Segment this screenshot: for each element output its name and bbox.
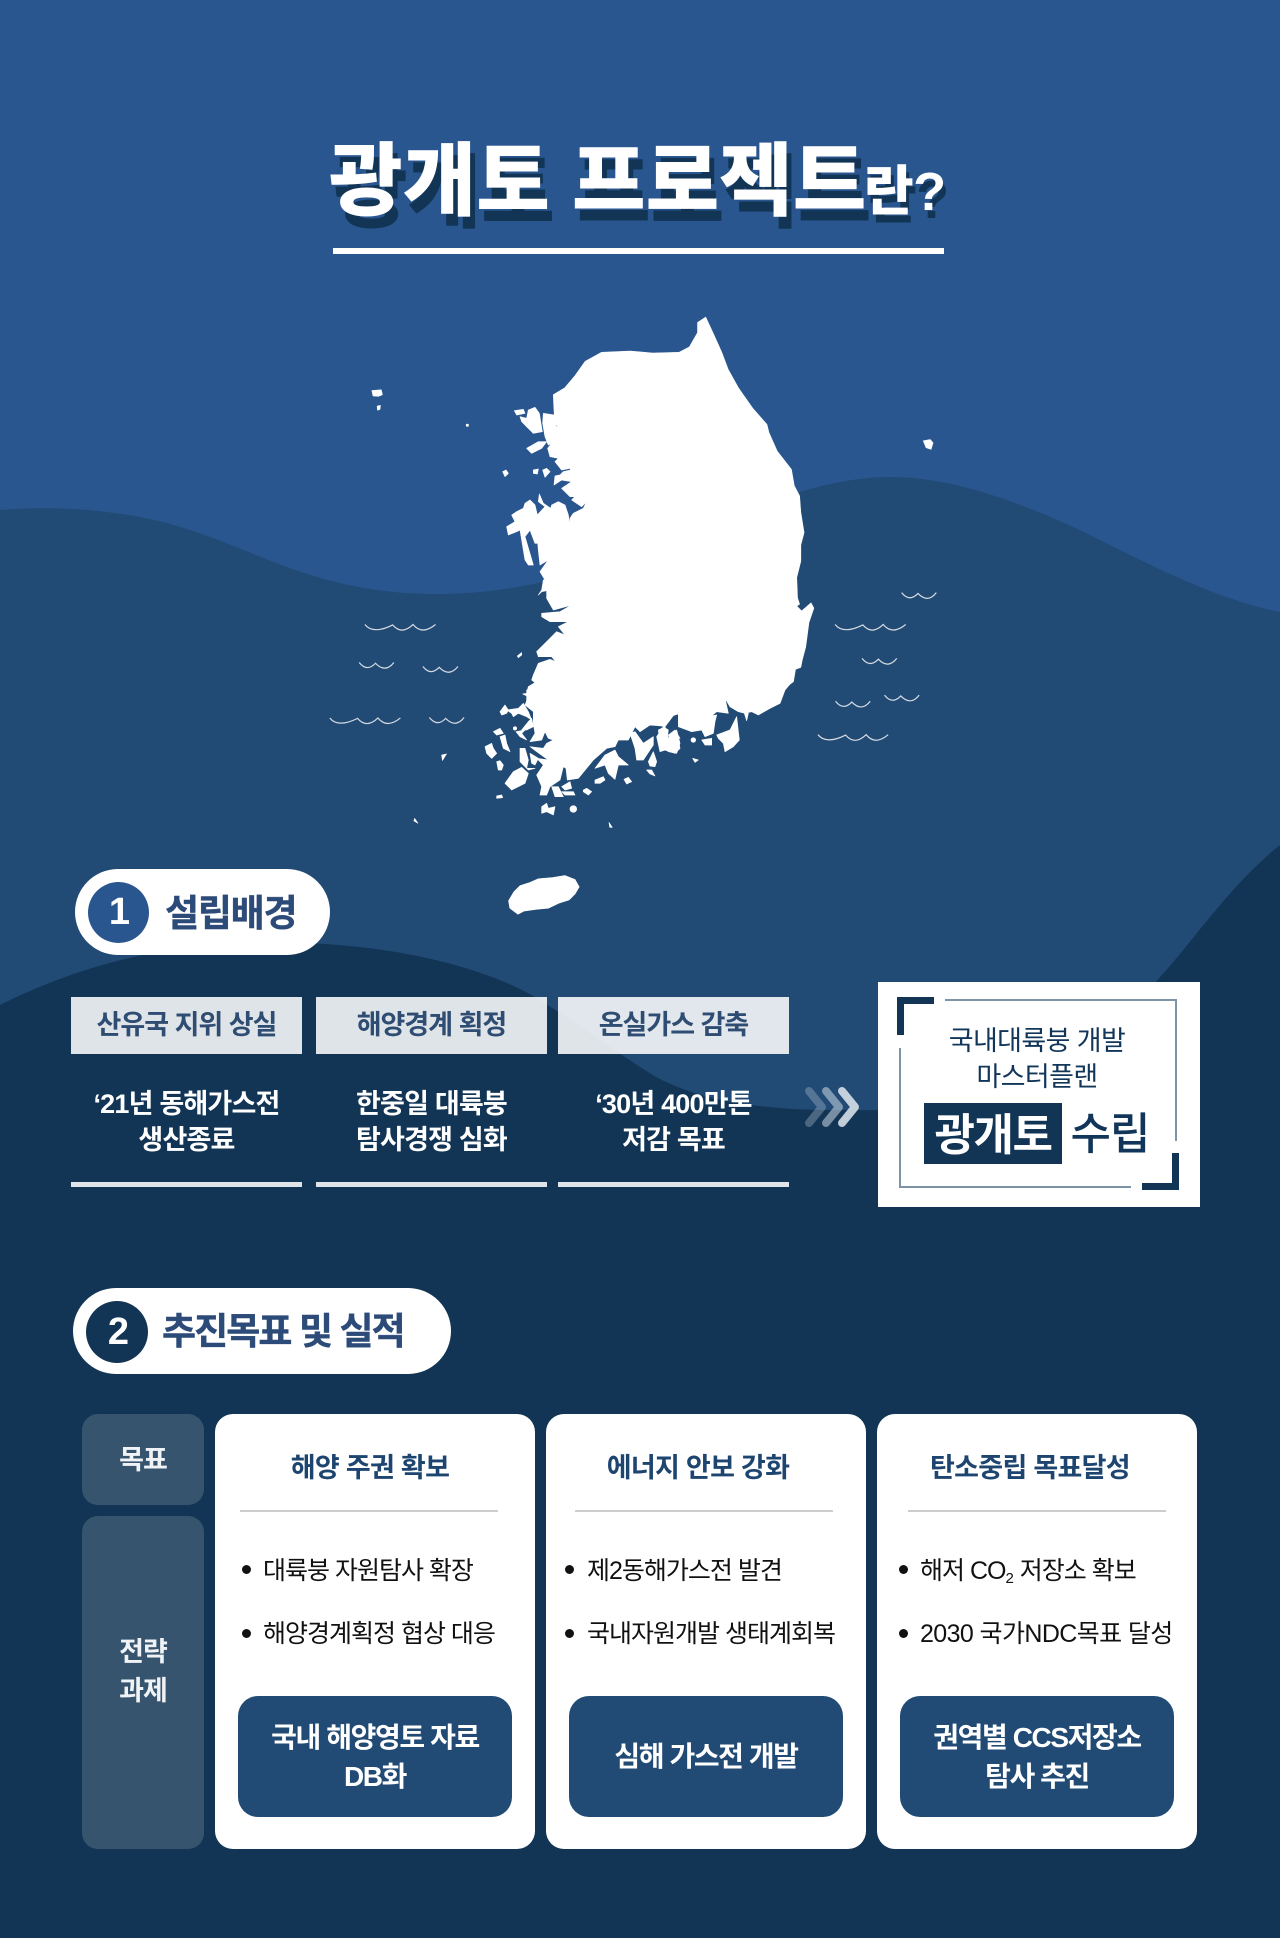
section 1 heading — [75, 869, 330, 955]
title suffix: 란? — [864, 162, 946, 222]
bullet text 1: 대륙붕 자원탐사 확장 — [263, 1557, 473, 1585]
highlighted name: 광개토 — [935, 1111, 1051, 1160]
number badge 1 — [88, 882, 149, 943]
description 3: ‘30년 400만톤 — [595, 1089, 752, 1119]
description 1 — [93, 1089, 280, 1155]
south-east coast and islands — [630, 680, 793, 762]
task button: 탐사 추진 — [985, 1760, 1089, 1792]
bullet 1 — [242, 1565, 251, 1574]
task button — [569, 1696, 843, 1816]
section 2 heading — [73, 1288, 451, 1374]
card 3 — [877, 1414, 1197, 1849]
description 2 — [356, 1089, 507, 1155]
reason: greenhouse gas: 온실가스 감축 — [599, 1010, 748, 1040]
south-west coast and islands — [485, 690, 693, 815]
west coast north and islands — [503, 390, 613, 580]
heading text: 추진목표 및 실적 — [162, 1311, 404, 1352]
description 1: ‘21년 동해가스전 — [93, 1089, 280, 1119]
thin frame lines — [897, 997, 1179, 1190]
title — [329, 137, 946, 229]
west coast south — [517, 580, 633, 720]
result panel: master plan — [878, 982, 1200, 1207]
title underline — [333, 248, 944, 254]
row label: strategic tasks — [82, 1516, 204, 1849]
highlighted name — [924, 1103, 1062, 1164]
panel text — [949, 1026, 1125, 1092]
panel text: 마스터플랜 — [976, 1062, 1098, 1092]
sea ripples — [330, 593, 936, 740]
number badge 2 — [86, 1301, 148, 1363]
reason: maritime boundary — [316, 997, 547, 1054]
bullet 1 — [899, 1565, 908, 1574]
row label: goal — [82, 1414, 204, 1505]
bullet text 1: 해저 CO2 저장소 확보 — [920, 1557, 1136, 1587]
number badge 2: 2 — [108, 1311, 129, 1353]
bullet text 2: 국내자원개발 생태계회복 — [587, 1620, 835, 1648]
task button: 권역별 CCS저장소 — [933, 1722, 1141, 1752]
card title: 해양 주권 확보 — [291, 1453, 449, 1483]
title word: Gwanggaeto: 광개토 — [329, 137, 550, 226]
reason: maritime boundary: 해양경계 획정 — [357, 1010, 506, 1040]
task button: 국내 해양영토 자료 — [271, 1722, 479, 1752]
bullet 2 — [242, 1629, 251, 1638]
row label: strategic tasks: 전략 — [119, 1637, 167, 1667]
panel text: 국내대륙붕 개발 — [949, 1026, 1125, 1056]
row label: strategic tasks: 과제 — [119, 1676, 167, 1706]
task button — [238, 1696, 512, 1816]
task button: 심해 가스전 개발 — [614, 1741, 798, 1772]
card 2 — [546, 1414, 866, 1849]
description 3 — [595, 1089, 752, 1155]
reason: oil producer status — [71, 997, 302, 1054]
number badge 1: 1 — [109, 891, 130, 933]
establishment word: 수립 — [1071, 1110, 1149, 1159]
description 3: 저감 목표 — [622, 1125, 725, 1155]
bullet text 2: 2030 국가NDC목표 달성 — [920, 1620, 1173, 1648]
card title: 에너지 안보 강화 — [607, 1453, 789, 1483]
mainland north and east coast — [372, 317, 933, 914]
task button — [900, 1696, 1174, 1816]
bullet 2 — [565, 1629, 574, 1638]
title word: project: 프로젝트 — [572, 137, 866, 226]
row label: goal: 목표 — [119, 1445, 167, 1475]
card title: 탄소중립 목표달성 — [930, 1453, 1130, 1483]
card 1 — [215, 1414, 535, 1849]
map of Korea — [329, 316, 937, 915]
reason: greenhouse gas — [558, 997, 789, 1054]
bullet text 1: 제2동해가스전 발견 — [587, 1557, 782, 1585]
description 1: 생산종료 — [138, 1125, 235, 1155]
bullet text 2: 해양경계획정 협상 대응 — [263, 1620, 495, 1648]
description 2: 한중일 대륙붕 — [356, 1089, 507, 1119]
reason: oil producer status: 산유국 지위 상실 — [97, 1010, 276, 1040]
task button: DB화 — [344, 1760, 406, 1792]
description 2: 탐사경쟁 심화 — [356, 1125, 507, 1155]
heading text: 설립배경 — [165, 893, 296, 934]
bullet 2 — [899, 1629, 908, 1638]
bullet 1 — [565, 1565, 574, 1574]
arrow chevrons — [805, 1087, 859, 1127]
